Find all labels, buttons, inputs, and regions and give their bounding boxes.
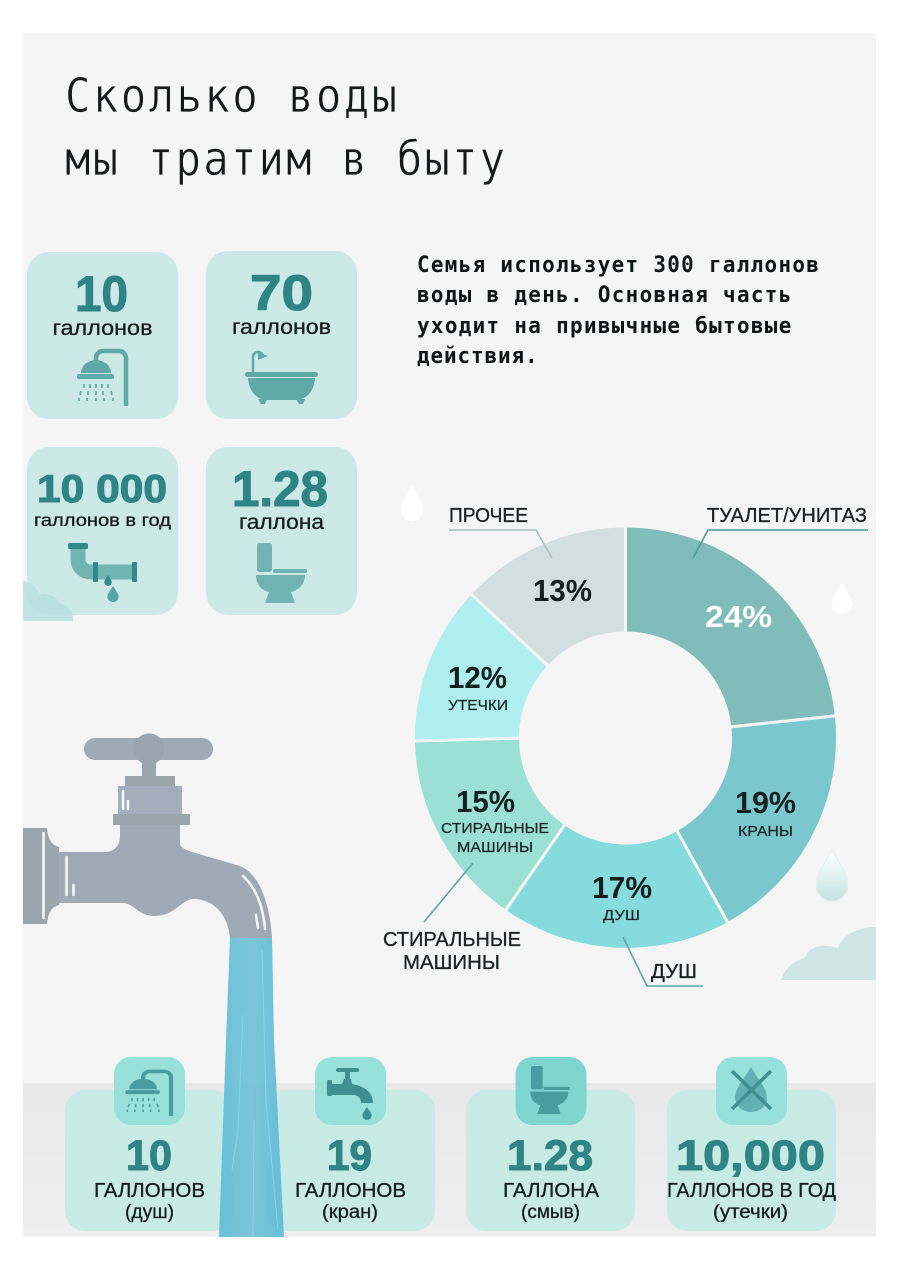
icon tile: toilet bbox=[516, 1057, 586, 1125]
bottom card: faucet bbox=[266, 1057, 435, 1231]
faucet bonnet bbox=[113, 776, 190, 825]
stat card: toilet 1.28 gallons bbox=[206, 447, 357, 615]
intro text: уходит на привычные бытовые bbox=[417, 314, 791, 339]
bottom card: leaks: (утечки) bbox=[713, 1202, 788, 1223]
stat card: leak 10 000 gallons a year: галлонов в год bbox=[34, 510, 171, 530]
callout: toilet: ТУАЛЕТ/УНИТАЗ bbox=[707, 505, 867, 527]
callout: shower bbox=[623, 937, 703, 986]
segment: shower 17% bbox=[505, 824, 728, 949]
bottom card: toilet bbox=[466, 1057, 635, 1231]
donut values: 24% bbox=[705, 599, 772, 634]
callout: toilet bbox=[693, 505, 868, 558]
donut values: ДУШ bbox=[603, 907, 640, 924]
bottom card: faucet: 19 bbox=[327, 1132, 372, 1180]
intro text: воды в день. Основная часть bbox=[417, 283, 791, 308]
stat card: bath 70 gallons: галлонов bbox=[232, 316, 331, 339]
faucet wall flange bbox=[23, 828, 59, 924]
donut chart bbox=[413, 526, 837, 949]
donut values: 15% bbox=[456, 784, 515, 819]
segment: other 13% bbox=[470, 526, 626, 666]
icon: toilet bbox=[256, 543, 307, 603]
donut values: МАШИНЫ bbox=[457, 839, 533, 856]
segment: faucets 19% bbox=[676, 716, 837, 923]
icon: leaking pipe bbox=[68, 543, 137, 602]
donut values: 13% bbox=[533, 573, 592, 608]
callout: other: ПРОЧЕЕ bbox=[449, 505, 528, 527]
bottom card: shower: ГАЛЛОНОВ bbox=[94, 1179, 205, 1202]
icon: bathtub bbox=[245, 352, 318, 404]
bottom card: toilet: (смыв) bbox=[521, 1202, 580, 1223]
donut values: 19% bbox=[735, 785, 796, 820]
water stream bbox=[219, 938, 284, 1237]
stat card: leak 10 000 gallons a year bbox=[27, 447, 178, 615]
segment: toilet 24% bbox=[626, 526, 836, 727]
segment: washing machines 15% bbox=[414, 738, 565, 911]
donut values bbox=[441, 573, 796, 924]
donut values: КРАНЫ bbox=[738, 823, 793, 840]
icon tile: faucet bbox=[315, 1057, 386, 1125]
bottom card: shower: 10 bbox=[126, 1132, 172, 1180]
faucet handle bbox=[84, 734, 213, 777]
bottom card: faucet: (кран) bbox=[322, 1202, 378, 1223]
intro text: Семья использует 300 галлонов bbox=[417, 253, 819, 278]
bottom card: shower bbox=[65, 1057, 233, 1231]
title: Сколько воды bbox=[65, 68, 397, 124]
bottom card: toilet: 1.28 bbox=[507, 1132, 593, 1180]
donut values: 17% bbox=[592, 870, 652, 905]
bottom card: leaks: ГАЛЛОНОВ В ГОД bbox=[667, 1179, 836, 1202]
icon tile: shower bbox=[114, 1057, 185, 1125]
segment: leaks 12% bbox=[413, 593, 549, 741]
stat card: shower 10 gallons: 10 bbox=[75, 266, 128, 322]
faucet body bbox=[59, 825, 272, 938]
bottom card: shower: (душ) bbox=[125, 1202, 174, 1223]
stat card: shower 10 gallons: галлонов bbox=[52, 317, 152, 340]
callout: shower: ДУШ bbox=[651, 961, 697, 983]
bottom card: leaks bbox=[667, 1057, 836, 1231]
stat card: toilet 1.28 gallons: 1.28 bbox=[232, 461, 328, 517]
title bbox=[65, 68, 505, 187]
stat card: shower 10 gallons bbox=[27, 252, 178, 419]
intro text bbox=[417, 253, 819, 369]
donut values: 12% bbox=[448, 660, 507, 695]
icon: shower bbox=[77, 351, 126, 406]
decoration: water drops bbox=[401, 485, 852, 901]
decoration: left cloud bbox=[23, 581, 73, 621]
callout: washing machines: МАШИНЫ bbox=[403, 952, 500, 974]
bottom card: toilet: ГАЛЛОНА bbox=[503, 1179, 599, 1202]
donut values: СТИРАЛЬНЫЕ bbox=[441, 820, 549, 837]
icon tile: crossed drop bbox=[716, 1057, 787, 1125]
stat card: bath 70 gallons bbox=[206, 251, 357, 419]
bottom card: leaks: 10,000 bbox=[676, 1132, 825, 1180]
stat card: toilet 1.28 gallons: галлона bbox=[239, 511, 324, 534]
callout: washing machines: СТИРАЛЬНЫЕ bbox=[383, 929, 521, 951]
bottom card: faucet: ГАЛЛОНОВ bbox=[295, 1179, 406, 1202]
decoration: right cloud bbox=[781, 927, 876, 980]
stat card: bath 70 gallons: 70 bbox=[250, 265, 313, 321]
faucet bbox=[23, 734, 272, 938]
callout: other bbox=[449, 505, 552, 558]
title: мы тратим в быту bbox=[65, 131, 505, 187]
intro text: действия. bbox=[417, 344, 538, 369]
faucet highlights bbox=[44, 791, 265, 929]
stat card: leak 10 000 gallons a year: 10 000 bbox=[37, 468, 167, 511]
callout: washing machines bbox=[383, 863, 521, 974]
donut values: УТЕЧКИ bbox=[448, 697, 508, 714]
